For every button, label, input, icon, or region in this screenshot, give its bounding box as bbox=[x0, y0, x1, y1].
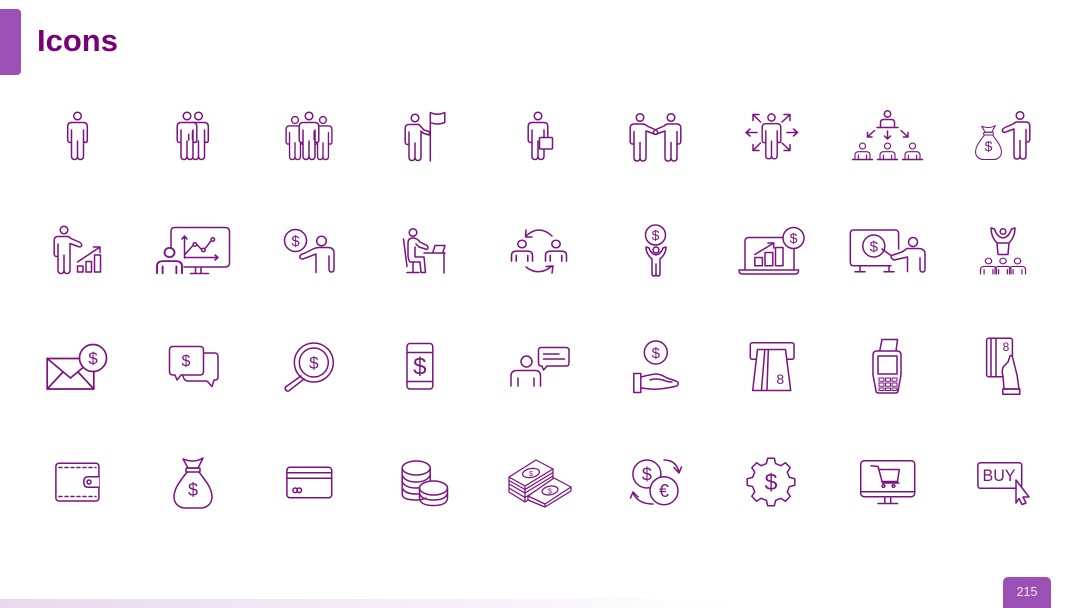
icon: computer shopping cart bbox=[861, 461, 915, 504]
icon: chat bubbles with dollar bbox=[170, 346, 218, 386]
icon: laptop with chart and coin: $ bbox=[790, 230, 798, 246]
icon: person at desk bbox=[404, 229, 445, 273]
icon: hand holding card bbox=[987, 338, 1020, 394]
icon: money bag and person bbox=[976, 112, 1030, 160]
icon: dollar euro exchange bbox=[630, 460, 682, 505]
icon: laptop with chart and coin bbox=[739, 228, 804, 274]
icon: magnifier with dollar bbox=[285, 343, 333, 391]
icon: card payment terminal bbox=[873, 340, 901, 393]
footer gradient strip bbox=[0, 599, 1080, 608]
icon: hierarchy of people bbox=[852, 111, 922, 160]
icon: phone with dollar bbox=[407, 344, 433, 389]
icon: envelope with coin bbox=[47, 344, 106, 389]
icon: money bag bbox=[174, 458, 212, 508]
icon: hand holding card: 8 bbox=[1003, 340, 1010, 354]
icon: money bag and person: $ bbox=[985, 138, 993, 154]
icon: leader cheering over crowd bbox=[980, 228, 1026, 274]
icon: person and growth chart bbox=[54, 226, 100, 274]
icon: two people bbox=[177, 112, 208, 160]
icon: hand holding coin: $ bbox=[652, 345, 661, 362]
icon: gear with dollar bbox=[747, 458, 795, 506]
icon: coin and person pointing bbox=[284, 230, 334, 272]
icon: buy button with cursor: BUY bbox=[982, 466, 1016, 485]
icon: hand holding coin bbox=[634, 341, 678, 392]
icon: ATM card slot: 8 bbox=[776, 371, 784, 387]
icon: buy button with cursor bbox=[978, 463, 1029, 504]
icon: stacks of banknotes: $ bbox=[529, 471, 533, 478]
icon: two people exchange bbox=[512, 230, 566, 273]
icon: wallet bbox=[56, 463, 99, 501]
icon: person with speech bubble bbox=[511, 348, 569, 386]
icon: cheering person with coin bbox=[646, 225, 666, 276]
icon: cheering person with coin: $ bbox=[652, 227, 660, 243]
page number badge bbox=[1003, 577, 1051, 608]
icon: person with outward arrows bbox=[746, 114, 798, 159]
icon: person presenting chart on screen bbox=[157, 228, 230, 274]
icon: person bbox=[68, 112, 87, 160]
icon: coin and person pointing: $ bbox=[291, 233, 300, 250]
icon: gear with dollar: $ bbox=[765, 469, 778, 495]
icon: money bag: $ bbox=[188, 480, 198, 500]
icon: three people bbox=[286, 112, 332, 160]
icon: stacks of coins bbox=[402, 461, 448, 506]
icon: magnifier with dollar: $ bbox=[309, 354, 319, 372]
icon: dollar euro exchange: $ bbox=[642, 464, 652, 484]
icon: dollar euro exchange: € bbox=[659, 481, 669, 501]
icon: stacks of banknotes: $ bbox=[548, 488, 552, 496]
header tab bbox=[0, 9, 21, 75]
icon: envelope with coin: $ bbox=[88, 349, 98, 368]
page number badge: 215 bbox=[1017, 585, 1037, 599]
icon: person with flag bbox=[405, 112, 445, 161]
icon: person presenting coin on screen: $ bbox=[870, 238, 879, 256]
icon: chat bubbles with dollar: $ bbox=[182, 353, 191, 370]
icon: phone with dollar: $ bbox=[413, 354, 426, 380]
icon: stacks of banknotes bbox=[509, 460, 571, 507]
icon: person presenting coin on screen bbox=[850, 230, 925, 272]
icon: credit card bbox=[287, 467, 332, 498]
icon: handshake bbox=[630, 114, 681, 161]
icon: ATM card slot bbox=[750, 343, 794, 390]
title: Icons bbox=[37, 23, 118, 58]
icon: person with briefcase bbox=[528, 112, 552, 160]
